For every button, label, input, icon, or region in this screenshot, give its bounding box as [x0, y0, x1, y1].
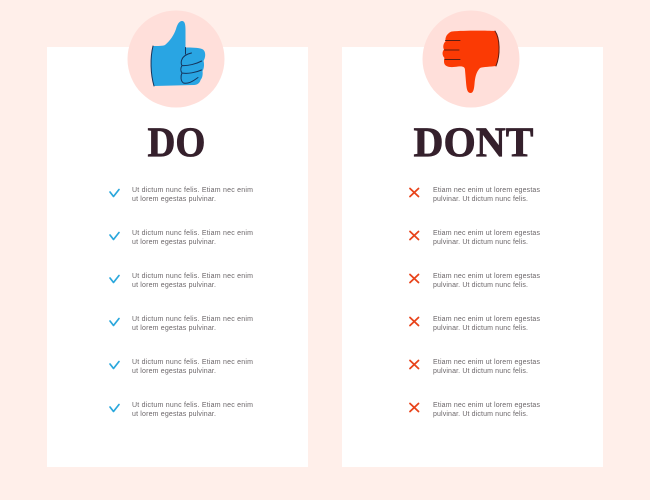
icon: thumbs up	[128, 10, 224, 108]
do item 2: Ut dictum nunc felis. Etiam nec enim	[132, 230, 253, 237]
do item 1: ut lorem egestas pulvinar.	[132, 196, 216, 203]
do item 6: ut lorem egestas pulvinar.	[132, 411, 216, 418]
do item 4: ut lorem egestas pulvinar.	[132, 325, 216, 332]
dont item 5: pulvinar. Ut dictum nunc felis.	[433, 368, 528, 375]
do item 3: ut lorem egestas pulvinar.	[132, 282, 216, 289]
do item 6: Ut dictum nunc felis. Etiam nec enim	[132, 402, 253, 409]
dont item 6	[410, 402, 540, 418]
do item 4	[110, 316, 253, 332]
do item 5: Ut dictum nunc felis. Etiam nec enim	[132, 359, 253, 366]
list: dont items	[410, 187, 540, 418]
dont item 3	[410, 273, 540, 289]
dont item 2: Etiam nec enim ut lorem egestas	[433, 230, 540, 237]
dont item 4: Etiam nec enim ut lorem egestas	[433, 316, 540, 323]
list: do items	[110, 187, 253, 418]
panel: dont	[342, 10, 603, 467]
dont item 2	[410, 230, 540, 246]
dont item 6: Etiam nec enim ut lorem egestas	[433, 402, 540, 409]
dont item 5	[410, 359, 540, 375]
do item 4: Ut dictum nunc felis. Etiam nec enim	[132, 316, 253, 323]
heading: DO: DO	[148, 120, 206, 166]
dont item 1	[410, 187, 540, 203]
icon: thumbs down	[422, 10, 520, 108]
do item 3	[110, 273, 253, 289]
do item 5	[110, 359, 253, 375]
dont item 1: Etiam nec enim ut lorem egestas	[433, 187, 540, 194]
do item 3: Ut dictum nunc felis. Etiam nec enim	[132, 273, 253, 280]
dont item 6: pulvinar. Ut dictum nunc felis.	[433, 411, 528, 418]
dont item 4: pulvinar. Ut dictum nunc felis.	[433, 325, 528, 332]
do item 1: Ut dictum nunc felis. Etiam nec enim	[132, 187, 253, 194]
dont item 5: Etiam nec enim ut lorem egestas	[433, 359, 540, 366]
dont item 4	[410, 316, 540, 332]
do item 5: ut lorem egestas pulvinar.	[132, 368, 216, 375]
do item 2: ut lorem egestas pulvinar.	[132, 239, 216, 246]
do item 1	[110, 187, 253, 203]
heading: DONT: DONT	[414, 120, 534, 166]
dont item 3: pulvinar. Ut dictum nunc felis.	[433, 282, 528, 289]
dont item 3: Etiam nec enim ut lorem egestas	[433, 273, 540, 280]
do item 2	[110, 230, 253, 246]
dont item 1: pulvinar. Ut dictum nunc felis.	[433, 196, 528, 203]
panel: do	[47, 10, 308, 467]
do item 6	[110, 402, 253, 418]
dont item 2: pulvinar. Ut dictum nunc felis.	[433, 239, 528, 246]
